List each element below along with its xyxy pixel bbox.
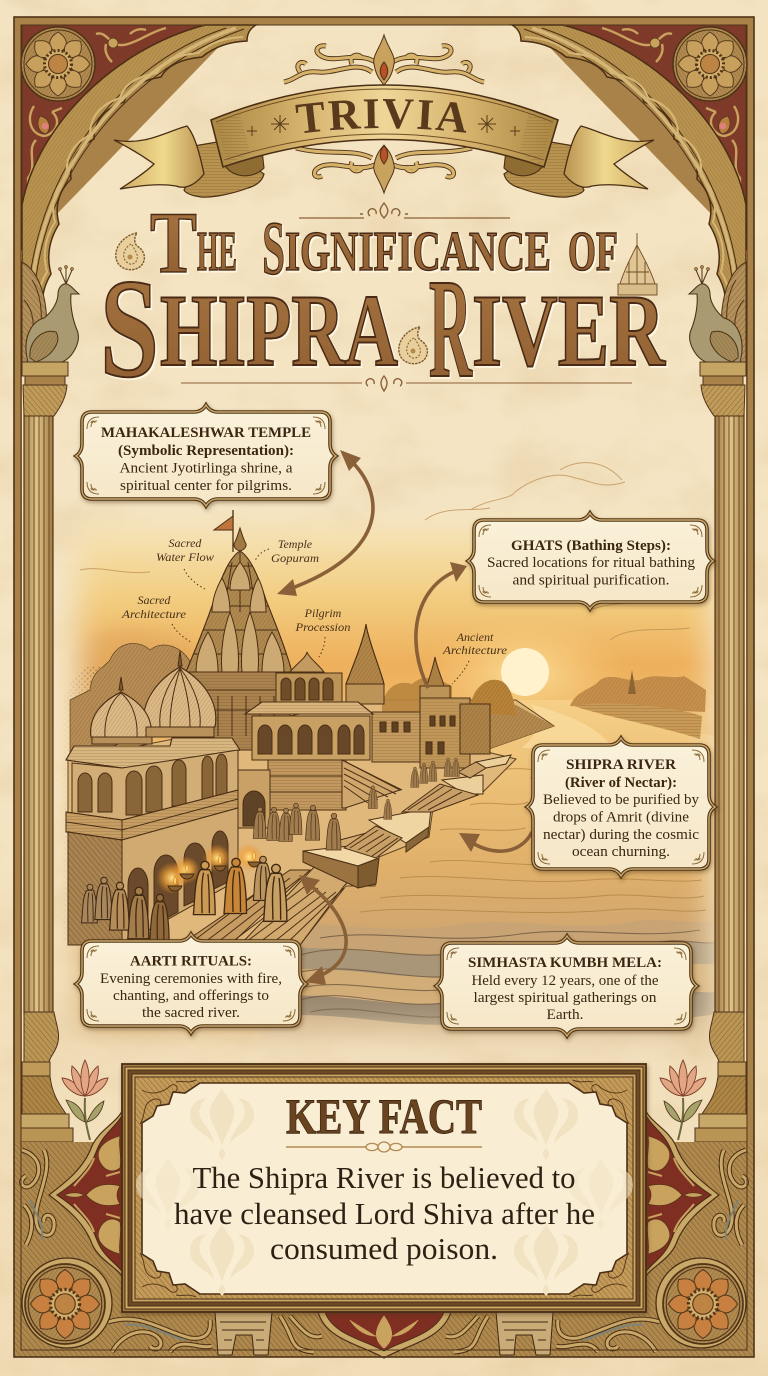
- river bank ground: [68, 700, 554, 945]
- callout: Simhasta Kumbh Mela: Held every 12 years, one of the: [472, 973, 659, 989]
- label: pilgrim procession: [294, 606, 350, 657]
- river ripples: [360, 769, 706, 913]
- sun: [501, 648, 549, 696]
- callout: Ghats: [468, 513, 713, 609]
- red cartouche: [318, 1312, 451, 1358]
- key fact body text: The Shipra River is believed to: [192, 1160, 576, 1195]
- flame tips: [174, 851, 256, 885]
- cornice: [66, 738, 240, 768]
- key fact heading: KEY FACT: [286, 1088, 482, 1144]
- ribbon main band: [211, 85, 558, 167]
- label: sacred architecture: Architecture: [121, 607, 187, 621]
- banner stars: [247, 115, 520, 136]
- key fact body text: have cleansed Lord Shiva after he: [174, 1196, 595, 1231]
- icon: left lotus: [62, 1060, 108, 1140]
- right ribbon tail: [504, 126, 654, 197]
- ribbon curled ends: [223, 150, 545, 176]
- callout: Shipra River: Believed to be purified by: [543, 792, 699, 808]
- label: temple gopuram: Gopuram: [271, 551, 319, 565]
- damask background pattern: [136, 1088, 633, 1296]
- far temples and buildings: [346, 624, 490, 768]
- italic labels on the illustration: [121, 536, 508, 684]
- elephants: [215, 1312, 553, 1355]
- callout: Ghats: and spiritual purification.: [512, 572, 670, 588]
- top flourish ornament: [284, 35, 484, 177]
- key fact body text: [174, 1160, 595, 1266]
- left red medallion: [49, 1106, 124, 1280]
- pavilion: [236, 652, 402, 828]
- top divider: [299, 203, 510, 218]
- arrow: Mahakaleshwar to temple: [277, 450, 373, 596]
- label: temple gopuram: Temple: [278, 537, 313, 551]
- key fact body text: consumed poison.: [270, 1231, 498, 1266]
- callout: Shipra River: ocean churning.: [572, 844, 670, 860]
- label: ancient architecture: Ancient: [456, 630, 494, 644]
- callout: Shipra River: SHIPRA RIVER: [566, 757, 676, 773]
- callout: Aarti Rituals: the sacred river.: [142, 1005, 240, 1021]
- callout: Simhasta Kumbh Mela: SIMHASTA KUMBH MELA:: [468, 955, 662, 971]
- callout: Mahakaleshwar Temple: spiritual center for pilgrims.: [120, 478, 292, 494]
- icon: paisley left: [116, 233, 144, 270]
- banner: Trivia ribbon: [114, 84, 654, 198]
- panel: key fact: [122, 1064, 646, 1312]
- callout: Shipra River: drops of Amrit (divine: [553, 810, 689, 826]
- balcony band: [66, 790, 238, 840]
- label: sacred water flow: [156, 536, 214, 590]
- callout: Aarti Rituals: Evening ceremonies with fire,: [100, 971, 282, 987]
- label: sacred water flow: Sacred: [169, 536, 202, 550]
- callout: Aarti Rituals: AARTI RITUALS:: [130, 954, 252, 970]
- decorative top arch and corners: [14, 17, 754, 362]
- title line 1: HE: [197, 221, 237, 283]
- callout: Shipra River: (River of Nectar):: [565, 775, 677, 791]
- callout: Mahakaleshwar Temple: [76, 405, 336, 506]
- callout: Aarti Rituals: chanting, and offerings to: [113, 988, 269, 1004]
- front dome: [91, 692, 151, 737]
- bottom flourish ornament: [374, 145, 394, 193]
- left corner ornament: [14, 17, 268, 362]
- title line 1: OF: [559, 221, 618, 283]
- aarti worshippers: [82, 856, 287, 942]
- title line 2: HIPRA: [160, 274, 398, 388]
- ghat steps and platforms: [180, 755, 511, 945]
- icon: small temple: [618, 233, 657, 295]
- label: sacred architecture: [121, 593, 191, 642]
- title line 2: IVER: [472, 274, 666, 388]
- left pillar: [14, 250, 73, 1250]
- title line 2: R: [414, 249, 473, 407]
- label: temple gopuram: [255, 537, 319, 565]
- callout: Simhasta Kumbh Mela: [436, 936, 697, 1036]
- label: pilgrim procession: Procession: [294, 620, 350, 634]
- title line 2: S: [100, 249, 159, 407]
- back dome: [143, 667, 216, 727]
- clouds: [80, 463, 690, 640]
- left domed palace: [66, 651, 240, 945]
- flag: [232, 510, 234, 552]
- callout: Aarti Rituals: [76, 934, 306, 1033]
- label: ancient architecture: Architecture: [442, 643, 508, 657]
- right scrollwork: [446, 1150, 746, 1352]
- sky and river wash: [60, 524, 714, 1048]
- callout: Ghats: Sacred locations for ritual bathing: [487, 555, 696, 571]
- blue-grey scroll accents: [30, 1200, 738, 1340]
- callout: Mahakaleshwar Temple: Ancient Jyotirlinga shrine, a: [120, 460, 293, 476]
- bottom ornamental band: [14, 1142, 754, 1358]
- bottom divider: [181, 376, 632, 391]
- panel frame mouldings: [122, 1064, 646, 1312]
- aarti flames glow: [156, 843, 263, 894]
- icon: right bottom rosette: [656, 1258, 746, 1348]
- left ribbon tail: [114, 126, 264, 197]
- upper storey: [72, 750, 238, 822]
- panel corner scrolls: [140, 1080, 629, 1297]
- left scrollwork: [22, 1150, 322, 1352]
- title line 1: S: [252, 207, 285, 291]
- title line 1: IGNIFICANCE: [285, 221, 551, 283]
- callout: Simhasta Kumbh Mela: Earth.: [546, 1007, 584, 1023]
- label: sacred architecture: Sacred: [138, 593, 171, 607]
- callout: Simhasta Kumbh Mela: largest spiritual gatherings on: [474, 990, 657, 1006]
- banner title: TRIVIA: [295, 99, 466, 133]
- icon: left peacock: [22, 262, 79, 362]
- main temple gopuram: [186, 510, 292, 750]
- lower arcade: [122, 808, 238, 945]
- label: ancient architecture: [442, 630, 508, 684]
- icon: right peacock: [689, 262, 746, 362]
- callout: Mahakaleshwar Temple: MAHAKALESHWAR TEMPLE: [101, 425, 311, 441]
- icon: right lotus: [660, 1060, 706, 1140]
- label: sacred water flow: Water Flow: [156, 550, 214, 564]
- arrow: aarti rituals: [299, 875, 346, 985]
- icon: left bottom rosette: [22, 1258, 112, 1348]
- far trees and bank: [570, 670, 706, 739]
- panel inner parchment: [142, 1083, 627, 1294]
- callout: Shipra River: [527, 738, 715, 876]
- arrow: Shipra river: [459, 832, 532, 852]
- heading divider: [286, 1142, 482, 1152]
- callout: Shipra River: nectar) during the cosmic: [543, 827, 699, 843]
- right red medallion: [644, 1106, 719, 1280]
- icon: paisley middle: [399, 327, 427, 364]
- right pillar: [695, 250, 754, 1250]
- main title: [100, 195, 666, 407]
- background trees: [70, 643, 516, 760]
- right corner ornament: [500, 17, 754, 362]
- distant and middle pilgrims: [253, 758, 460, 850]
- label: pilgrim procession: Pilgrim: [304, 606, 342, 620]
- callout: Mahakaleshwar Temple: (Symbolic Representation):: [118, 443, 294, 459]
- title line 1: T: [150, 195, 197, 292]
- callout: Ghats: GHATS (Bathing Steps):: [511, 538, 671, 554]
- illustration: Shipra river ghats at sunset: [50, 463, 730, 1070]
- arrow: ghats: [416, 562, 467, 688]
